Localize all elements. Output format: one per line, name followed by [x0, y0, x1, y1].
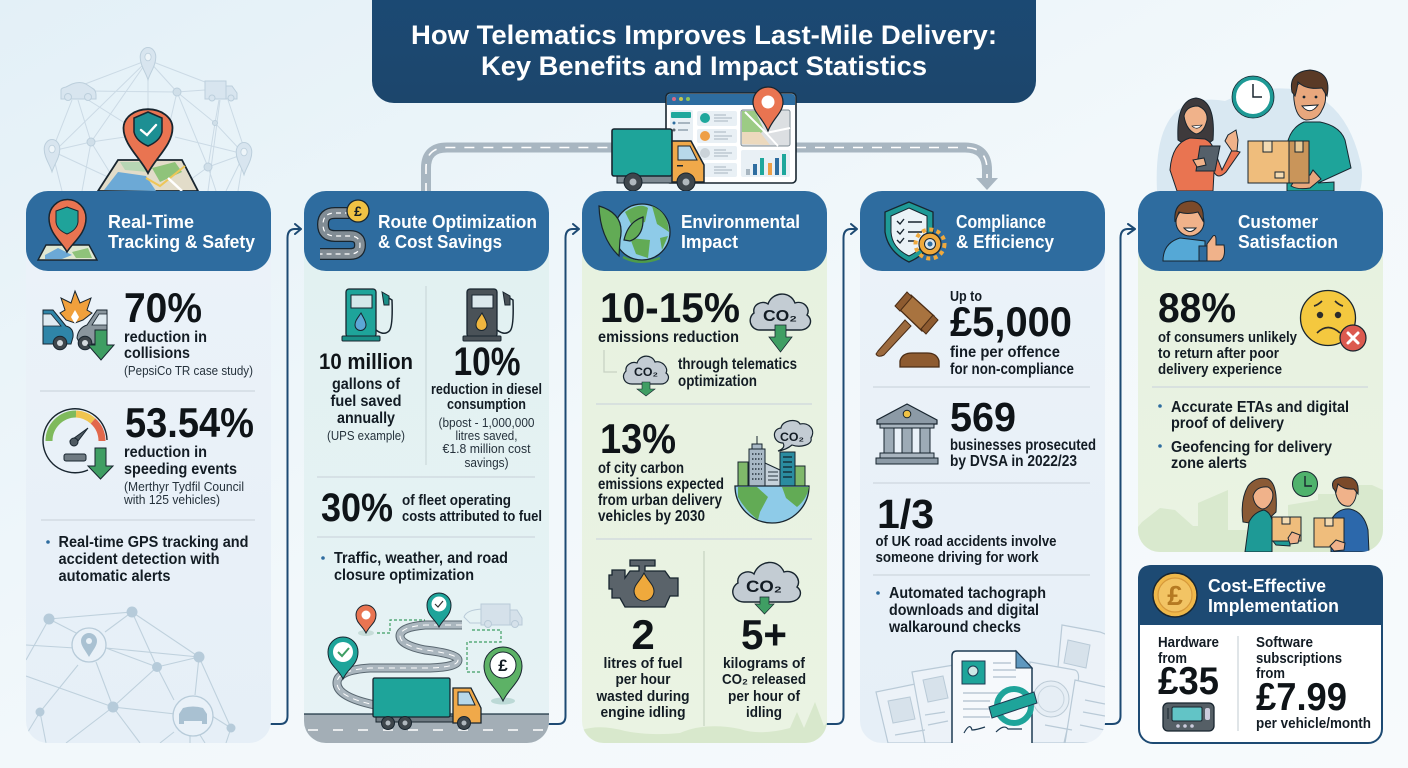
bullet: traffic optimization: closure optimization: [334, 567, 474, 584]
heading: & Cost Savings: [378, 232, 502, 252]
heading: [1238, 212, 1338, 252]
stat: one third of UK road accidents: 1/3: [877, 491, 934, 537]
stat: 10 million gallons: (UPS example): [327, 429, 405, 443]
icon: dashboard pin: [753, 87, 783, 131]
heading: Tracking & Safety: [108, 232, 255, 252]
stat: 569 businesses prosecuted: 569: [950, 394, 1016, 440]
stat: 53.54% reduction in speeding events: speeding events: [124, 461, 237, 478]
stat: 53.54% reduction in speeding events: reduction in: [124, 444, 207, 461]
illustration: customer receiving parcel: [1157, 70, 1362, 191]
stat: 70% reduction in collisions: 70%: [124, 284, 202, 331]
icon: CO2 cloud with arrow: CO₂: [763, 308, 797, 325]
bullet: ETAs: Accurate ETAs and digital: [1171, 399, 1349, 416]
green stamp: [989, 689, 1037, 723]
main document: [952, 651, 1032, 752]
stat: 10 million gallons: fuel saved: [330, 393, 402, 410]
stat: 10 million gallons: annually: [337, 410, 395, 427]
title text: [411, 20, 997, 81]
icon: faint pin right: [236, 142, 252, 175]
stat: 10% diesel reduction: consumption: [447, 397, 526, 413]
bullet: traffic optimization: [321, 550, 508, 584]
icon: background network with vehicles and pins: [44, 48, 252, 191]
panel: cost-effective implementation: [1138, 565, 1383, 743]
illustration: network bottom: [26, 606, 236, 743]
person: woman handing parcel: [1242, 478, 1290, 552]
stat: 5+ kilograms of CO2: per hour of: [728, 688, 801, 705]
bullet: tachograph: Automated tachograph: [889, 585, 1046, 602]
bullet: ETAs: [1158, 399, 1349, 432]
icon: delivery truck: [612, 129, 704, 191]
stat: 569 businesses prosecuted: businesses prosecuted: [950, 437, 1096, 454]
panel: route optimization and cost savings: [304, 191, 549, 743]
stat: 2 litres of fuel: 2: [631, 611, 655, 658]
icon: faint pin top: [140, 48, 156, 80]
icon: boy with thumbs up: [1163, 201, 1224, 261]
heading: Environmental: [681, 212, 800, 232]
stat: hardware from 35 pounds: £35: [1158, 660, 1219, 703]
icon: sad face with cross: [1300, 290, 1366, 351]
stat: 10% diesel reduction: €1.8 million cost: [442, 442, 531, 456]
header: cost-effective: [1138, 565, 1383, 625]
bullet: GPS tracking: [46, 534, 249, 585]
stat: 10 million gallons: 10 million: [319, 349, 413, 374]
clock small: [1292, 472, 1318, 496]
icon: teal check pin large: [328, 637, 358, 679]
stat: 569 businesses prosecuted: by DVSA in 2022/23: [950, 453, 1077, 470]
heading: Real-Time: [108, 212, 194, 232]
stat: 10% diesel reduction: litres saved,: [456, 429, 518, 443]
icon: faint truck: [205, 81, 237, 101]
stat: 2 litres of fuel: [596, 611, 690, 721]
stat: 30% of fleet costs: [321, 486, 542, 530]
stat: 10 million gallons: [319, 349, 413, 443]
stat: 13% of city carbon emissions: 13%: [600, 415, 676, 462]
stat: 88% of consumers: delivery experience: [1158, 361, 1282, 378]
text: through telematics: [678, 356, 797, 390]
header: customer satisfaction: [1138, 191, 1383, 271]
stat: hardware from 35 pounds: [1158, 635, 1219, 703]
stat: software from 7.99 pounds: £7.99: [1256, 676, 1347, 719]
stat: 13% of city carbon emissions: vehicles by 2030: [598, 508, 705, 525]
stat: 5+ kilograms of CO2: idling: [746, 704, 782, 721]
stat: 53.54% reduction in speeding events: with 125 vehicles): [123, 493, 220, 507]
stat: up to 5,000 pound fine: £5,000: [950, 298, 1072, 345]
icon: teal fuel pump: [342, 289, 392, 341]
stat: 5+ kilograms of CO2: [722, 611, 806, 721]
parcel box: [1248, 141, 1309, 183]
heading: & Efficiency: [956, 232, 1054, 252]
stat: 88% of consumers: to return after poor: [1158, 345, 1279, 362]
heading: Satisfaction: [1238, 232, 1338, 252]
stat: software from 7.99 pounds: per vehicle/month: [1256, 716, 1371, 732]
stat: 10 million gallons: gallons of: [332, 376, 401, 393]
stat: 70% reduction in collisions: collisions: [124, 345, 190, 362]
heading: [1208, 576, 1339, 616]
person: man receiving parcel: [1331, 477, 1369, 552]
bullet: geofencing: Geofencing for delivery: [1171, 439, 1332, 456]
stat: software from 7.99 pounds: [1256, 635, 1371, 732]
stat: 88% of consumers: [1158, 284, 1298, 378]
stat: 70% reduction in collisions: reduction in: [124, 329, 207, 346]
stat: up to 5,000 pound fine: fine per offence: [950, 344, 1060, 361]
illustration: parcel handover: [1242, 472, 1369, 552]
faded truck: [464, 604, 522, 628]
icon: pound coin: [1153, 573, 1197, 617]
icon: winding road and pound coin: [320, 200, 369, 254]
stat: 30% of fleet costs: of fleet operating: [402, 492, 511, 509]
icon: teal check pin: [427, 593, 451, 627]
bullet: tachograph: downloads and digital: [889, 602, 1039, 619]
stat: 10% diesel reduction: savings): [464, 456, 508, 470]
bullet: ETAs: proof of delivery: [1171, 415, 1284, 432]
panel: real-time tracking and safety: [26, 191, 271, 743]
icon: map with location pin and shield: [98, 109, 198, 191]
parcels: [1272, 517, 1345, 551]
stat: 70% reduction in collisions: (PepsiCo TR case study): [124, 364, 253, 378]
stat: 53.54% reduction in speeding events: (Merthyr Tydfil Council: [124, 480, 244, 494]
stat: 5+ kilograms of CO2: CO₂ released: [722, 671, 806, 688]
heading: Customer: [1238, 212, 1318, 232]
stat: one third of UK road accidents: of UK road accidents involve: [876, 533, 1056, 550]
bullet: traffic optimization: Traffic, weather, and road: [334, 550, 508, 567]
icon: clock: [1232, 76, 1274, 118]
icon: green pound pin: £: [498, 656, 508, 675]
stat: 13% of city carbon emissions: of city carbon: [598, 460, 684, 477]
icon: faint pin left: [44, 140, 60, 172]
title banner: [372, 0, 1036, 103]
stat: 10-15% emissions reduction: 10-15%: [600, 284, 740, 331]
stat: up to 5,000 pound fine: for non-compliance: [950, 361, 1074, 378]
header: real-time tracking: [26, 191, 271, 271]
illustration: winding route with truck and pins: [304, 593, 549, 743]
stat: software from 7.99 pounds: subscriptions: [1256, 651, 1342, 667]
icon: green pound pin: [484, 647, 522, 704]
icon: car collision: [43, 291, 114, 360]
arrow connector 1 to 2: [271, 224, 301, 724]
stat: 30% of fleet costs: 30%: [321, 486, 393, 530]
stat: one third of UK road accidents: someone driving for work: [876, 549, 1039, 566]
panel: customer satisfaction: [1138, 191, 1383, 552]
icon: map pin with shield: [38, 200, 97, 260]
heading: [956, 212, 1054, 252]
title text: Key Benefits and Impact Statistics: [481, 51, 927, 81]
text: through telematics: through telematics: [678, 356, 797, 373]
heading: [378, 212, 537, 252]
icon: telematics device: [1163, 703, 1214, 731]
stat: 53.54% reduction in speeding events: 53.54%: [125, 399, 254, 446]
heading: Implementation: [1208, 596, 1339, 616]
icon: CO2 cloud with arrow: [750, 294, 811, 352]
stat: software from 7.99 pounds: from: [1256, 666, 1285, 682]
icon: small CO2 cloud: CO₂: [634, 367, 658, 379]
icon: courthouse: [876, 404, 938, 464]
icon: shield with checklist and gear: [885, 202, 944, 262]
bullet: geofencing: [1158, 439, 1332, 472]
stat: 53.54% reduction in speeding events: [123, 399, 254, 507]
stat: one third of UK road accidents: [876, 491, 1056, 566]
icon: grey fuel pump: [463, 289, 513, 341]
decor: skyline: [1138, 485, 1383, 552]
road strip: [304, 714, 549, 743]
stat: 5+ kilograms of CO2: kilograms of: [723, 655, 806, 672]
panel: environmental impact: [582, 191, 827, 743]
decor: green landscape: [582, 702, 827, 743]
icon: red pin: [356, 605, 376, 636]
icon: route truck: [373, 678, 481, 730]
icon: CO2 cloud idling: CO₂: [746, 577, 782, 596]
heading: Compliance: [956, 212, 1046, 232]
bullet: GPS tracking: Real-time GPS tracking and: [58, 534, 248, 551]
stat: 13% of city carbon emissions: [598, 415, 724, 525]
road connector: right dashed road with arrow: [790, 148, 998, 190]
dashboard window: [666, 93, 796, 183]
icon: speedometer with down arrow: [43, 409, 113, 479]
panel: compliance and efficiency: [860, 191, 1120, 752]
bullet: GPS tracking: automatic alerts: [58, 568, 170, 585]
arrow connector 3 to 4: [827, 224, 857, 724]
bullet: tachograph: [876, 585, 1046, 636]
stat: 569 businesses prosecuted: [950, 394, 1096, 470]
heading: Cost-Effective: [1208, 576, 1326, 596]
stat: 88% of consumers: of consumers unlikely: [1158, 329, 1298, 346]
stat: 5+ kilograms of CO2: 5+: [741, 611, 787, 658]
stat: software from 7.99 pounds: Software: [1256, 635, 1313, 651]
stat: 2 litres of fuel: engine idling: [600, 704, 686, 721]
icon: gavel: [876, 292, 939, 367]
heading: [681, 212, 800, 252]
person: woman with tablet: [1170, 98, 1240, 191]
stat: 2 litres of fuel: wasted during: [596, 688, 690, 705]
stat: 10% diesel reduction: 10%: [454, 340, 520, 384]
heading: [108, 212, 255, 252]
stat: 70% reduction in collisions: [124, 284, 253, 378]
stat: 13% of city carbon emissions: emissions expected: [598, 476, 724, 493]
stat: 10% diesel reduction: [431, 340, 542, 470]
stat: up to 5,000 pound fine: [950, 289, 1074, 378]
icon: main orange pin: [124, 109, 172, 173]
stat: hardware from 35 pounds: from: [1158, 651, 1187, 667]
icon: small CO2 cloud: [624, 356, 668, 396]
header: compliance: [860, 191, 1105, 271]
bullet: tachograph: walkaround checks: [888, 619, 1021, 636]
stat: 88% of consumers: 88%: [1158, 284, 1236, 331]
arrow connector 4 to 5: [1105, 224, 1135, 724]
illustration: telematics dashboard and truck: [612, 87, 796, 191]
stat: 2 litres of fuel: litres of fuel: [604, 655, 682, 672]
bullet: geofencing: zone alerts: [1171, 455, 1247, 472]
bullet: GPS tracking: accident detection with: [58, 551, 220, 568]
text: through telematics: optimization: [678, 373, 757, 390]
stat: 2 litres of fuel: per hour: [616, 671, 671, 688]
icon: engine with oil drop: [609, 560, 678, 607]
icon: city on globe with CO2 bubble: CO₂: [780, 432, 804, 444]
heading: Impact: [681, 232, 738, 252]
arrow connector 2 to 3: [549, 224, 579, 724]
header: environmental impact: [582, 191, 827, 271]
person: delivery man: [1287, 70, 1351, 191]
header: route optimization: [304, 191, 549, 271]
stat: 10-15% emissions reduction: emissions reduction: [598, 329, 739, 346]
illustration: documents with stamp: [875, 624, 1105, 743]
icon: globe with leaves: [599, 204, 670, 262]
stat: up to 5,000 pound fine: Up to: [950, 289, 982, 305]
icon: CO2 cloud idling: [733, 562, 800, 614]
stat: hardware from 35 pounds: Hardware: [1158, 635, 1219, 651]
stat: 13% of city carbon emissions: from urban delivery: [598, 492, 722, 509]
title text: How Telematics Improves Last-Mile Delivery:: [411, 20, 997, 50]
icon: winding road and pound coin: £: [354, 203, 362, 219]
icon: pound coin: £: [1167, 580, 1183, 611]
stat: 10% diesel reduction: (bpost - 1,000,000: [438, 416, 535, 430]
road connector: left dashed road: [426, 148, 615, 193]
stat: 30% of fleet costs: costs attributed to fuel: [402, 508, 542, 525]
heading: Route Optimization: [378, 212, 537, 232]
icon: city on globe with CO2 bubble: [735, 421, 813, 523]
stat: 10% diesel reduction: reduction in diesel: [431, 382, 542, 398]
icon: faint car: [61, 82, 96, 100]
